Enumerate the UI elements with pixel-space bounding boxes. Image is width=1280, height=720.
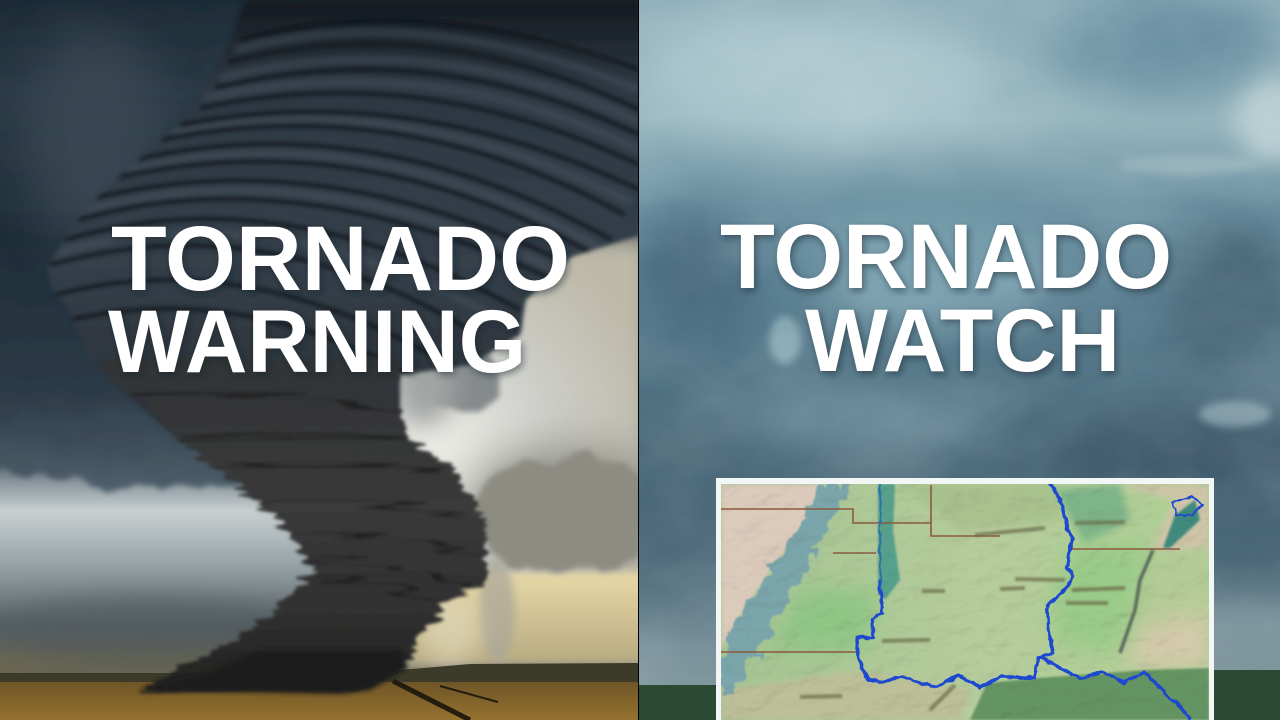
cloud shapes (630, 0, 1280, 660)
cloud texture (639, 0, 1280, 690)
tornado funnel upper bands (40, 0, 640, 440)
teal valley channel (878, 484, 900, 600)
heading: tornado warning: TORNADO (111, 208, 570, 310)
lighter cloud patch upper left (25, 30, 165, 250)
heading: tornado warning (108, 226, 572, 380)
heading: tornado watch (719, 223, 1174, 379)
heading: tornado watch: WATCH (805, 290, 1120, 390)
ridge lines (800, 522, 1125, 710)
state boundary lines (721, 485, 1180, 652)
horizon and hills (0, 663, 638, 682)
tan plains west (721, 484, 823, 650)
south terrain (721, 670, 970, 720)
sky background (639, 0, 1280, 690)
shaded relief texture (721, 484, 1209, 720)
teal lake north-east (1163, 500, 1200, 548)
lowlands south-east (1185, 545, 1207, 555)
heading: tornado watch: TORNADO (720, 206, 1172, 308)
dark escarpment (1120, 550, 1153, 653)
tornado funnel lower body (90, 350, 490, 700)
sky background (0, 0, 638, 720)
map frame (716, 478, 1214, 720)
dark tracks in field (393, 681, 498, 720)
green ground (639, 670, 1280, 720)
panel: tornado watch photo (630, 0, 1280, 720)
dark green forest (970, 668, 1209, 720)
brighter green patches (770, 590, 878, 650)
tornado debris base (139, 650, 408, 694)
tan uplands north-east (1122, 484, 1209, 553)
bright clouds right of tornado (397, 232, 638, 670)
wheat field ground (0, 682, 638, 720)
blue-teal river delta strip (722, 484, 850, 695)
grey haze left (0, 596, 320, 664)
heading: tornado warning: WARNING (108, 291, 526, 391)
blue rivers (857, 484, 1202, 718)
panel: tornado warning photo (0, 0, 672, 720)
map inset (716, 478, 1214, 720)
dark shelf cloud left (0, 43, 244, 496)
map terrain (721, 484, 1209, 720)
north terrain (911, 485, 1058, 528)
